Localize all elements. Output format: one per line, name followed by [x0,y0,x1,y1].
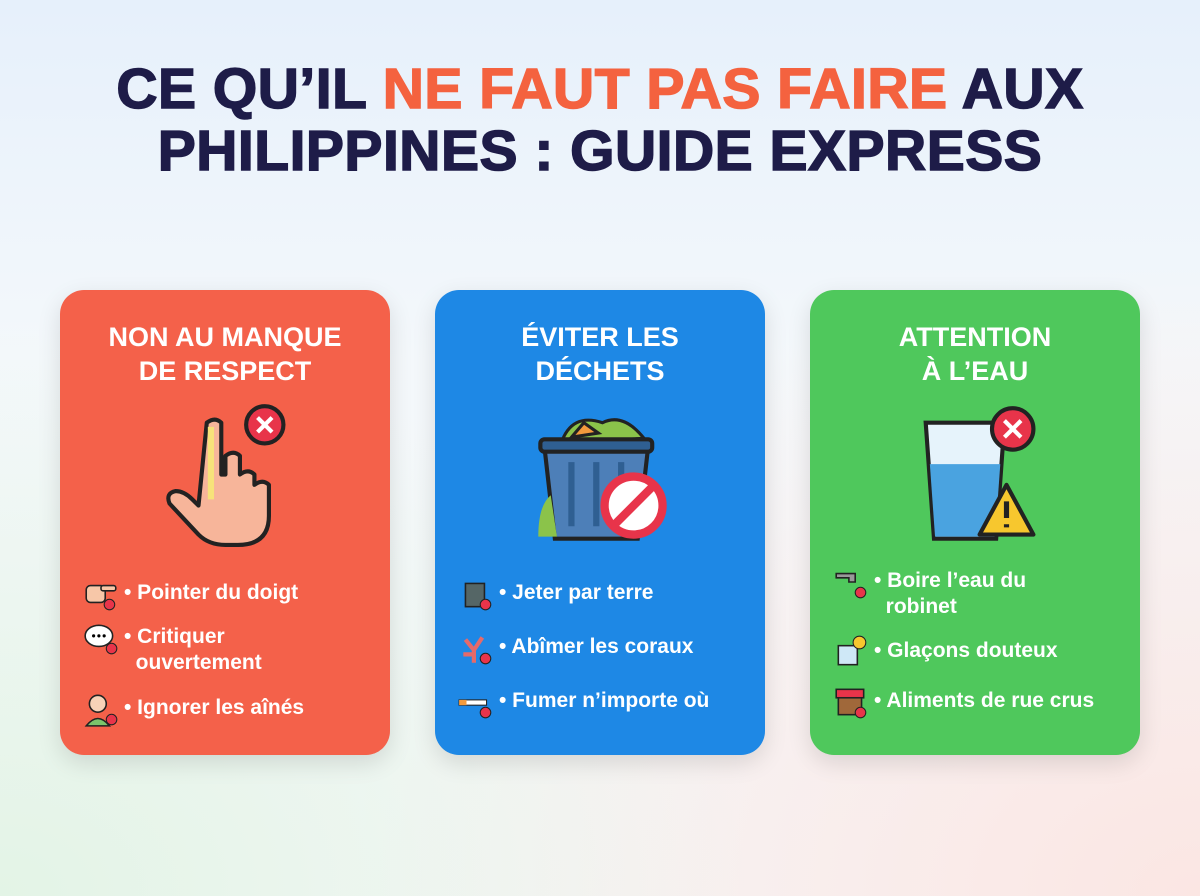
heading: respect [108,322,342,386]
title [116,57,1084,183]
item: critiquer [84,624,262,674]
title: PHILIPPINES : GUIDE EXPRESS [158,119,1042,183]
item: coraux [463,635,694,664]
heading: déchets [521,322,679,386]
icon: trash can [538,418,667,541]
item: robinet [835,569,1026,618]
heading: respect: NON AU MANQUE [108,322,342,352]
item: glaçons [838,636,1058,666]
item: coraux: • Abîmer les coraux [499,635,694,658]
item: jeter [464,581,653,610]
item: glaçons: • Glaçons douteux [874,639,1058,662]
item: fumer [458,689,709,718]
item: critiquer: ouvertement [136,651,262,674]
icon: water glass [924,406,1036,541]
heading: eau [899,322,1051,386]
heading: respect: DE RESPECT [139,356,311,386]
panel: respect [60,290,390,755]
panel: eau [810,290,1140,755]
icon: pointing hand [166,404,286,547]
item: pointer: • Pointer du doigt [124,581,298,604]
item: fumer: • Fumer n’importe où [499,689,709,712]
heading: déchets: DÉCHETS [535,356,664,386]
heading: eau: ATTENTION [899,322,1051,352]
item: aînés: • Ignorer les aînés [124,696,304,719]
heading: eau: À L’EAU [922,356,1028,386]
panel: déchets [435,290,765,755]
title: CE QU’IL NE FAUT PAS FAIRE AUX [116,57,1084,121]
item: jeter: • Jeter par terre [499,581,653,604]
item: pointer [85,581,298,610]
item: critiquer: • Critiquer [124,625,225,648]
item: robinet: robinet [886,595,957,618]
item: robinet: • Boire l’eau du [874,569,1026,592]
item: rue [835,688,1094,718]
item: rue: • Aliments de rue crus [874,689,1094,712]
heading: déchets: ÉVITER LES [521,322,679,352]
item: aînés [84,694,304,727]
